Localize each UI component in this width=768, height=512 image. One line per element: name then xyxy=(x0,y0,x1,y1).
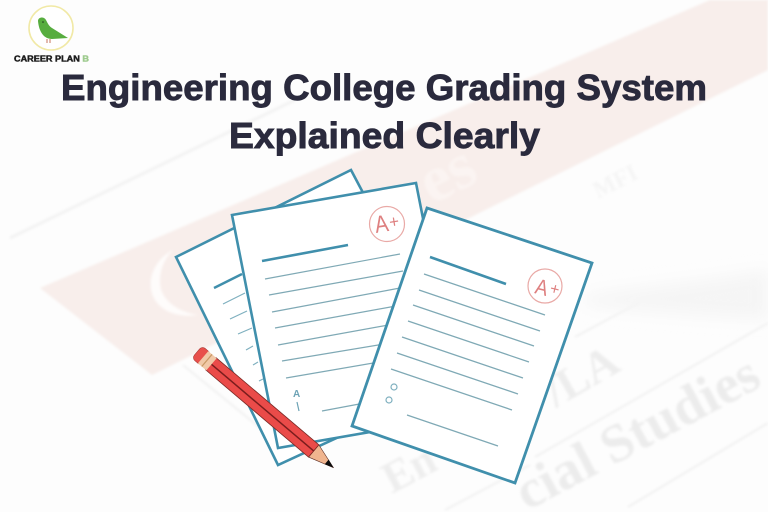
title line 2: Explained Clearly xyxy=(229,115,540,156)
pencil ferrule xyxy=(198,351,217,370)
small marks on middle sheet xyxy=(293,389,300,411)
A+ stamp on front sheet: + xyxy=(548,280,561,299)
heading bar on middle sheet xyxy=(262,245,348,261)
A+ stamp on middle sheet: + xyxy=(388,212,401,232)
pencil wood tip xyxy=(309,445,339,474)
A+ stamp on front sheet xyxy=(528,269,562,303)
pencil xyxy=(192,346,339,474)
bullets on front sheet xyxy=(391,384,397,390)
faded background photo of a grade report: En xyxy=(374,434,444,503)
A+ stamp on front sheet: A xyxy=(533,275,551,301)
A+ stamp on middle sheet xyxy=(370,206,404,242)
front sheet xyxy=(352,208,592,483)
A+ stamp on middle sheet: A xyxy=(373,210,390,238)
logo: Career Plan B xyxy=(14,6,89,64)
small marks on middle sheet: A xyxy=(293,389,300,400)
logo wordmark: CAREER PLAN B xyxy=(14,54,89,64)
faded background photo of a grade report: es xyxy=(406,128,488,218)
faded background photo of a grade report: /LA xyxy=(535,334,627,417)
heading bar on front sheet xyxy=(430,257,506,284)
pencil eraser xyxy=(192,346,211,366)
title xyxy=(61,67,707,156)
back sheet xyxy=(176,170,462,465)
logo bird xyxy=(38,17,68,43)
pencil body xyxy=(206,358,319,457)
middle sheet xyxy=(232,183,462,448)
logo circle xyxy=(29,6,73,50)
ruled lines on front sheet xyxy=(391,274,545,446)
illustration: graded papers and pencil xyxy=(176,170,592,483)
title line 1: Engineering College Grading System xyxy=(61,67,707,108)
faded background photo of a grade report: MFI xyxy=(589,160,642,204)
ruled lines on middle sheet xyxy=(265,254,403,411)
